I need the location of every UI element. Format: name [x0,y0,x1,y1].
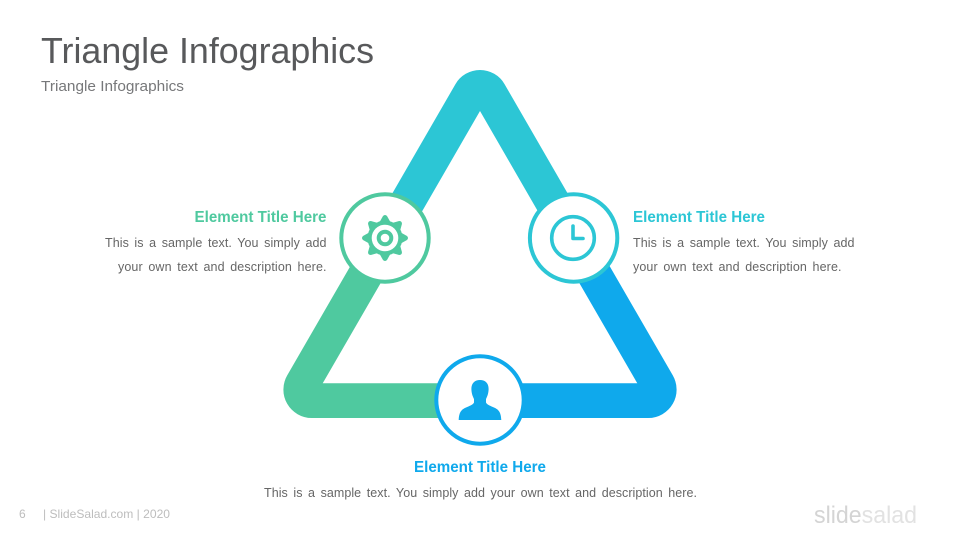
description: your own text and description here. [633,260,842,274]
triangle side: green [283,238,480,418]
description: This is a sample text. You simply add your own text and description here. [264,486,697,500]
heading: Element Title Here [633,209,765,226]
text block: left element [105,209,327,274]
title: Triangle Infographics [41,30,374,71]
description [633,236,855,274]
text block: right element [633,209,855,274]
icon badge: person [436,356,524,444]
description: This is a sample text. You simply add [633,236,855,250]
icon badge: clock [530,194,617,282]
icon badge: gear [341,194,429,282]
text block: bottom element [264,459,697,500]
heading: Element Title Here [414,459,546,476]
footer text: | SlideSalad.com | 2020 [43,507,170,521]
triangle side: cyan [367,70,593,238]
description: This is a sample text. You simply add [105,236,327,250]
logo wordmark: slidesalad [814,502,917,529]
description: your own text and description here. [118,260,326,274]
page number: 6 [19,507,26,521]
triangle side: blue [480,238,677,418]
triangle diagram [283,70,677,444]
heading: Element Title Here [194,209,327,226]
description [105,236,327,274]
subtitle: Triangle Infographics [41,78,184,95]
